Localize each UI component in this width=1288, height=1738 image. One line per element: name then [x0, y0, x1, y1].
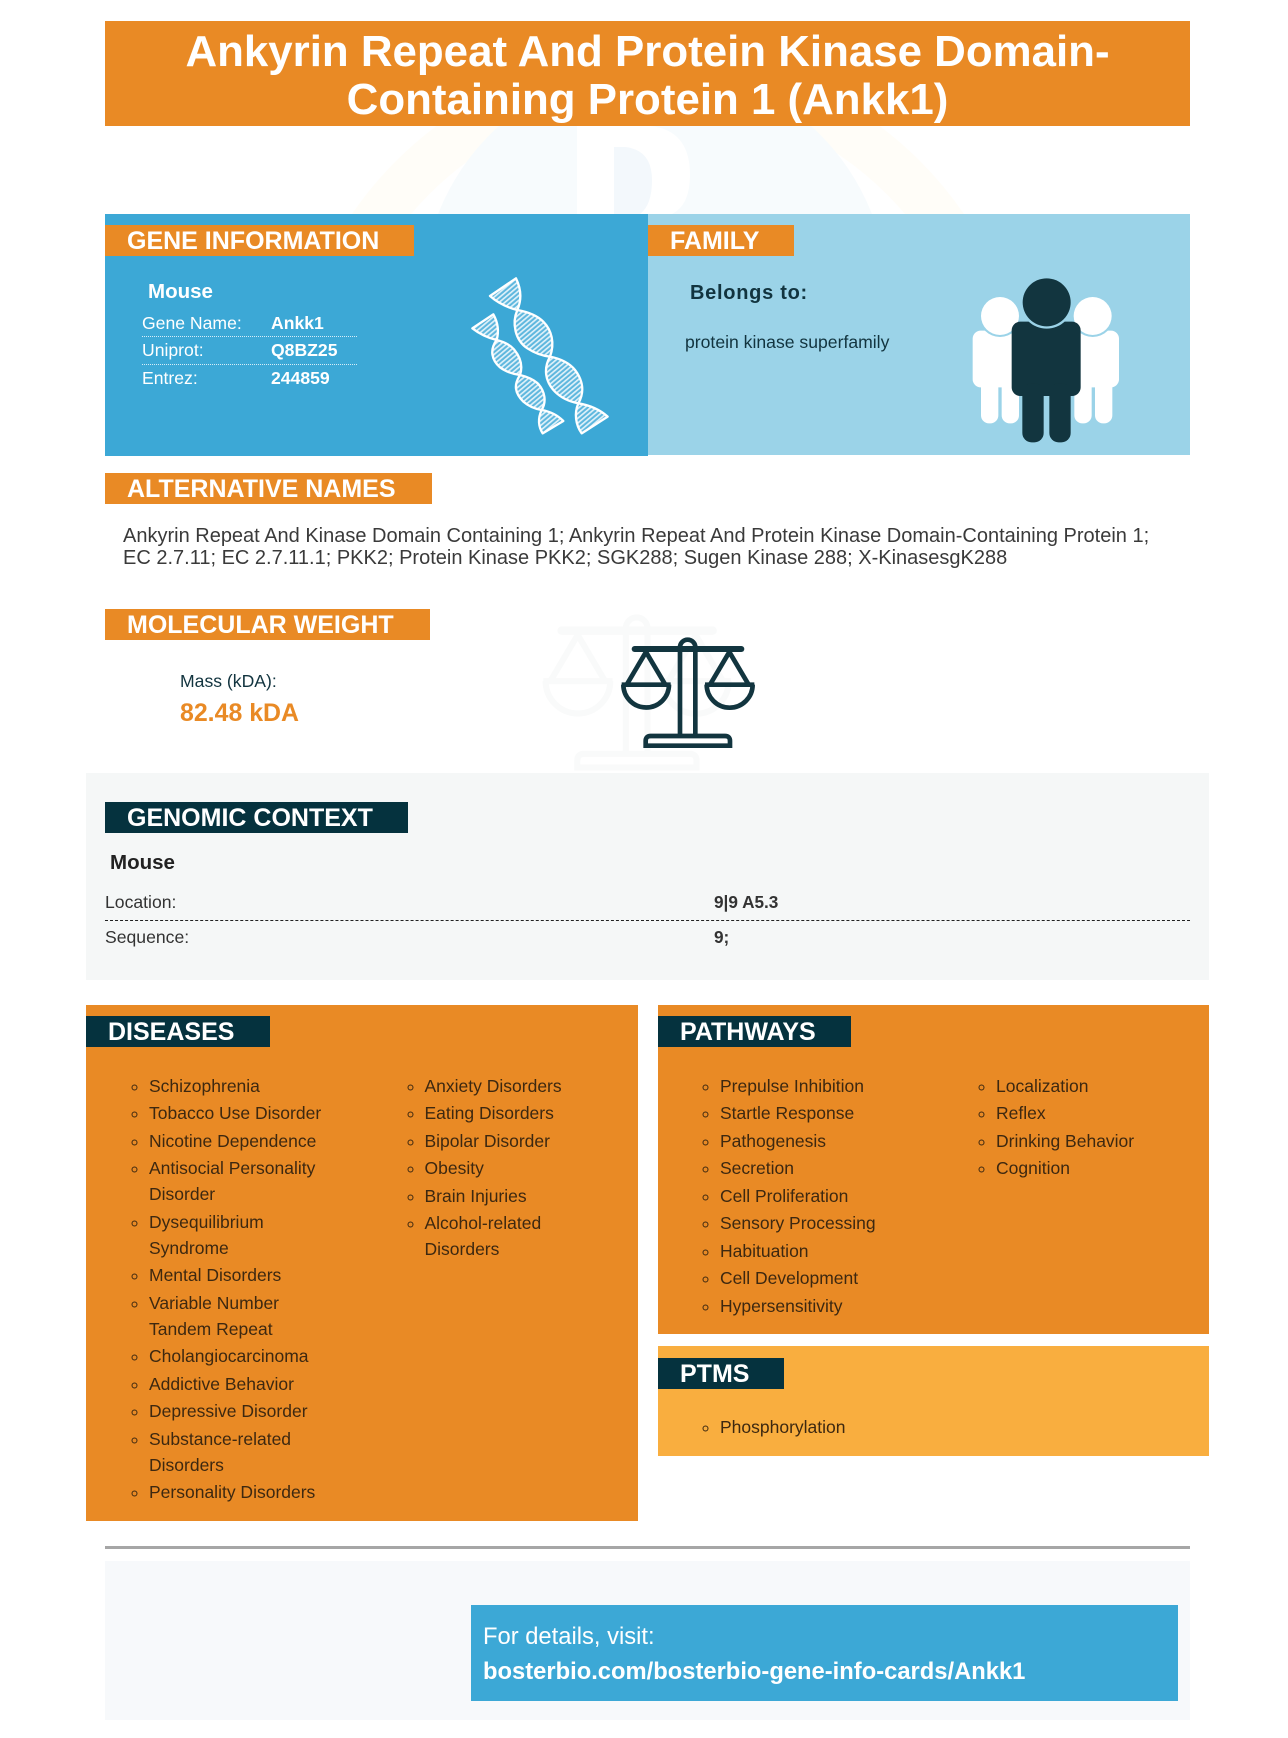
entrez row: 244859	[271, 368, 330, 388]
ptms list: Phosphorylation	[720, 1417, 846, 1437]
gene name row: Ankk1	[271, 313, 324, 333]
diseases list column 1: Personality Disorders	[149, 1482, 315, 1502]
diseases list column 2: Alcohol-related	[424, 1213, 541, 1233]
gene name row	[142, 310, 357, 337]
title banner: Containing Protein 1 (Ankk1)	[347, 75, 948, 124]
entrez row	[142, 368, 330, 388]
background watermark logo	[614, 147, 652, 214]
pathways list column 1: Sensory Processing	[720, 1213, 876, 1233]
diseases list column 1: Mental Disorders	[149, 1265, 281, 1285]
location row: 9|9 A5.3	[714, 892, 778, 912]
diseases list column 1: Disorders	[149, 1455, 224, 1475]
pathways list column 2: Localization	[996, 1076, 1088, 1096]
heading: gene information: GENE INFORMATION	[127, 227, 379, 255]
uniprot row	[142, 337, 357, 365]
diseases list column 2: Bipolar Disorder	[424, 1131, 550, 1151]
diseases list column 2: Brain Injuries	[424, 1186, 527, 1206]
details url: bosterbio.com/bosterbio-gene-info-cards/Ankk1	[483, 1658, 1025, 1685]
uniprot row: Q8BZ25	[271, 340, 338, 360]
diseases list column 2: Eating Disorders	[424, 1103, 554, 1123]
gene name row: Gene Name:	[142, 313, 242, 333]
diseases list column 1: Syndrome	[149, 1238, 229, 1258]
heading: family	[648, 225, 794, 256]
entrez row: Entrez:	[142, 368, 198, 388]
heading: family: FAMILY	[670, 227, 759, 255]
diseases list column 1	[132, 1076, 321, 1502]
icon: balance scale	[621, 637, 755, 748]
diseases list column 1: Cholangiocarcinoma	[149, 1346, 309, 1366]
icon: dark scale	[622, 640, 754, 746]
sequence row: Sequence:	[105, 927, 189, 947]
species label: mouse: Mouse	[148, 280, 213, 303]
uniprot row: Uniprot:	[142, 340, 204, 360]
title banner: Ankyrin Repeat And Protein Kinase Domain-	[185, 27, 1110, 76]
pathways list column 1: Secretion	[720, 1158, 794, 1178]
pathways list column 1	[702, 1076, 876, 1316]
diseases list column 2: Obesity	[424, 1158, 484, 1178]
pathways list column 2: Reflex	[996, 1103, 1046, 1123]
species label: mouse: Mouse	[110, 851, 175, 874]
heading: pathways	[658, 1016, 851, 1047]
heading: ptms: PTMS	[680, 1360, 749, 1388]
icon: dna double helix	[471, 277, 609, 434]
heading: diseases	[86, 1016, 270, 1047]
diseases list column 1: Depressive Disorder	[149, 1401, 308, 1421]
heading: ptms	[658, 1358, 784, 1389]
diseases list column 1: Antisocial Personality	[149, 1158, 315, 1178]
heading: alternative names: ALTERNATIVE NAMES	[127, 475, 396, 503]
icon: faint scale watermark	[543, 617, 731, 767]
panel: diseases	[86, 1005, 638, 1521]
panel: genomic context	[86, 773, 1209, 980]
belongs to label: Belongs to:	[690, 282, 808, 304]
panel: family	[648, 214, 1190, 455]
callout: details link	[471, 1605, 1178, 1701]
alternative names text: Ankyrin Repeat And Kinase Domain Containing 1; Ankyrin Repeat And Protein Kinase Domain-Containing Protein 1;	[123, 525, 1149, 547]
pathways list column 2	[978, 1076, 1134, 1178]
diseases list column 1: Variable Number	[149, 1293, 279, 1313]
diseases list column 1: Addictive Behavior	[149, 1374, 294, 1394]
pathways list column 1: Habituation	[720, 1241, 809, 1261]
panel: gene information	[105, 214, 648, 456]
pathways list column 1: Startle Response	[720, 1103, 854, 1123]
alternative names text: EC 2.7.11; EC 2.7.11.1; PKK2; Protein Kinase PKK2; SGK288; Sugen Kinase 288; X-KinasesgK288	[123, 547, 1007, 569]
diseases list column 1: Schizophrenia	[149, 1076, 260, 1096]
title banner	[105, 21, 1190, 126]
heading: genomic context: GENOMIC CONTEXT	[127, 804, 373, 832]
sequence row	[105, 927, 729, 947]
panel: pathways	[658, 1005, 1209, 1334]
mass label: Mass (kDA):	[180, 671, 277, 691]
location row	[105, 889, 1190, 921]
heading: pathways: PATHWAYS	[680, 1018, 816, 1046]
diseases list column 1: Tandem Repeat	[149, 1319, 273, 1339]
diseases list column 1: Dysequilibrium	[149, 1212, 264, 1232]
diseases list column 2: Disorders	[424, 1239, 499, 1259]
pathways list column 1: Cell Development	[720, 1268, 858, 1288]
diseases list column 1: Disorder	[149, 1184, 215, 1204]
pathways list column 1: Cell Proliferation	[720, 1186, 848, 1206]
pathways list column 1: Prepulse Inhibition	[720, 1076, 864, 1096]
details label: For details, visit:	[483, 1623, 655, 1650]
pathways list column 1: Hypersensitivity	[720, 1296, 843, 1316]
heading: diseases: DISEASES	[108, 1018, 234, 1046]
location row: Location:	[105, 892, 176, 912]
diseases list column 2: Anxiety Disorders	[424, 1076, 562, 1096]
panel: ptms	[658, 1346, 1209, 1456]
family value: protein kinase superfamily	[685, 332, 889, 352]
heading: molecular weight: MOLECULAR WEIGHT	[127, 611, 394, 639]
alternative names text	[123, 525, 1149, 569]
panel: footer	[105, 1561, 1190, 1720]
diseases list column 1: Substance-related	[149, 1429, 291, 1449]
icon: group of people	[972, 278, 1119, 442]
pathways list column 2: Cognition	[996, 1158, 1070, 1178]
diseases list column 1: Nicotine Dependence	[149, 1131, 316, 1151]
pathways list column 2: Drinking Behavior	[996, 1131, 1134, 1151]
diseases list column 2	[408, 1076, 562, 1259]
mass value: 82.48 kDA	[180, 699, 299, 727]
pathways list column 1: Pathogenesis	[720, 1131, 826, 1151]
sequence row: 9;	[714, 927, 729, 947]
diseases list column 1: Tobacco Use Disorder	[149, 1103, 321, 1123]
